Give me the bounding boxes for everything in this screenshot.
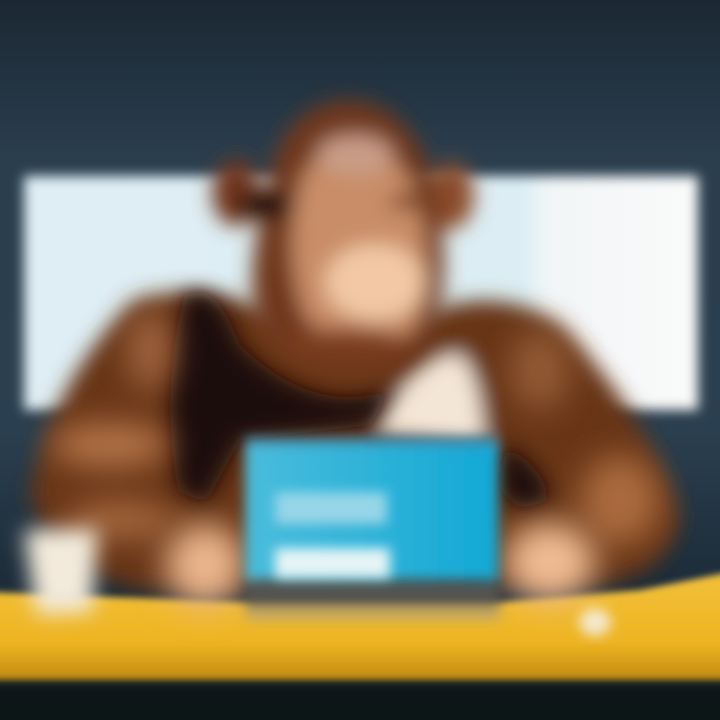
- monkey: dark neck and shoulder shadow: [171, 293, 550, 510]
- laptop: [245, 436, 500, 620]
- desk: [0, 572, 720, 680]
- laptop base: [245, 580, 500, 620]
- monkey: body: [30, 292, 680, 590]
- chest patch: [378, 355, 484, 445]
- laptop screen text bars: [275, 492, 390, 578]
- cup: [24, 528, 98, 614]
- face: [292, 146, 426, 348]
- panel: white backdrop: [24, 176, 698, 410]
- laptop screen: [245, 436, 498, 580]
- monkey: head: [212, 100, 474, 379]
- desk shadow: [0, 686, 720, 720]
- pencil on desk: [579, 608, 611, 636]
- monkey: arm highlights: [50, 310, 660, 545]
- monkey: hands: [165, 522, 596, 607]
